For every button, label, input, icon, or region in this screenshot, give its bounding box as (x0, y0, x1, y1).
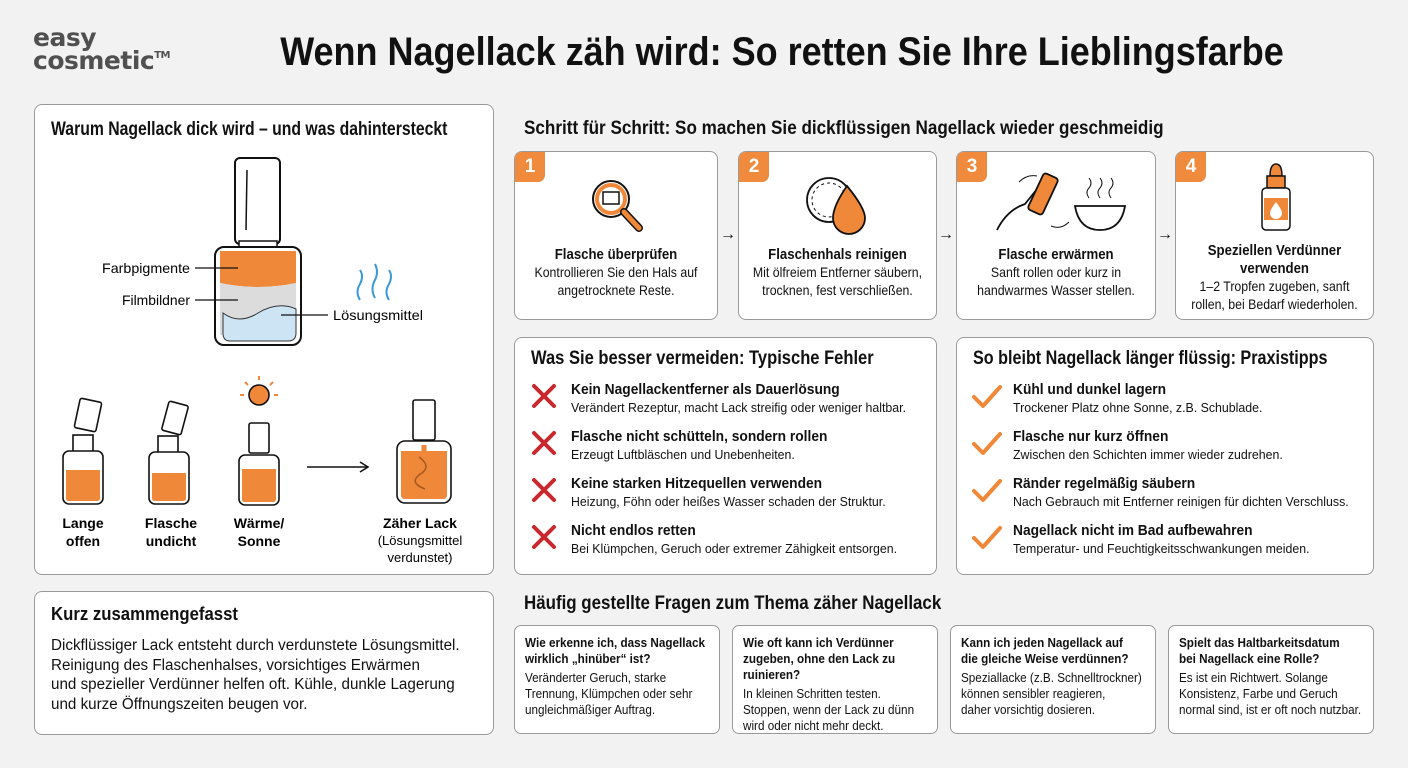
step 2: Flaschenhals reinigen (768, 246, 907, 263)
faq 3 (950, 625, 1156, 734)
tip 4 (972, 523, 1310, 556)
arrow: → (1157, 226, 1173, 243)
faq 2: wird oder nicht mehr deckt. (743, 718, 883, 733)
panel: mistakes: Heizung, Föhn oder heißes Wasser schaden der Struktur. (571, 494, 886, 509)
panel: tips: Temperatur- und Feuchtigkeitsschwankungen meiden. (1013, 541, 1310, 556)
panel: mistakes: Verändert Rezeptur, macht Lack streifig oder weniger haltbar. (571, 400, 906, 415)
text: summary: und kurze Öffnungszeiten beugen vor. (51, 696, 307, 712)
illustration: bottle layers: Lösungsmittel (333, 307, 423, 323)
illustration: bottle layers: Sonne (238, 533, 281, 549)
faq 3: die gleiche Weise verdünnen? (961, 651, 1129, 666)
panel: tips: Kühl und dunkel lagern (1013, 382, 1166, 398)
heading: causes: Warum Nagellack dick wird – und was dahintersteckt (51, 119, 447, 140)
heading: tips: So bleibt Nagellack länger flüssig: Praxistipps (973, 348, 1328, 369)
tip 3 (972, 476, 1349, 509)
heading: mistakes: Was Sie besser vermeiden: Typische Fehler (531, 348, 874, 369)
text: summary: und spezieller Verdünner helfen oft. Kühle, dunkle Lagerung (51, 676, 455, 693)
title: Wenn Nagellack zäh wird: So retten Sie Ihre Lieblingsfarbe (280, 30, 1284, 74)
step 4 (1175, 151, 1374, 320)
logo: cosmeticTM (33, 46, 170, 75)
illustration: bottle layers: verdunstet) (387, 550, 453, 565)
heading: summary: Kurz zusammengefasst (51, 604, 238, 624)
panel: mistakes: Bei Klümpchen, Geruch oder extremer Zähigkeit entsorgen. (571, 541, 897, 556)
heading: steps: Schritt für Schritt: So machen Sie dickflüssigen Nagellack wieder geschmeidig (524, 118, 1164, 139)
faq 1: Trennung, Klümpchen oder sehr (525, 686, 692, 701)
step 3: 3 (967, 156, 977, 177)
step 2 (738, 151, 937, 320)
panel: mistakes: Flasche nicht schütteln, sondern rollen (571, 429, 827, 445)
faq 2: In kleinen Schritten testen. (743, 686, 881, 701)
mistake 3 (532, 476, 886, 509)
step 1: Kontrollieren Sie den Hals auf (534, 264, 697, 280)
faq 4: Es ist ein Richtwert. Solange (1179, 670, 1328, 685)
text: summary: Dickflüssiger Lack entsteht durch verdunstete Lösungsmittel. (51, 637, 460, 654)
panel: tips: Zwischen den Schichten immer wieder zudrehen. (1013, 447, 1283, 462)
logo (33, 23, 170, 75)
step 4: Speziellen Verdünner (1208, 242, 1341, 259)
step 2: 2 (749, 156, 759, 177)
step 3 (956, 151, 1156, 320)
mistake 2 (532, 429, 827, 462)
faq 1: Veränderter Geruch, starke (525, 670, 666, 685)
small bottles (63, 385, 451, 505)
faq 4 (1168, 625, 1374, 734)
step 1: 1 (525, 156, 535, 177)
faq 4: normal sind, ist er oft noch nutzbar. (1179, 702, 1361, 717)
step 4: rollen, bei Bedarf wiederholen. (1191, 296, 1358, 312)
illustration: bottle layers: offen (66, 533, 100, 549)
tip 1 (972, 382, 1262, 415)
panel: tips (956, 337, 1374, 575)
panel: tips: Ränder regelmäßig säubern (1013, 476, 1195, 492)
icon: hands and bowl (996, 172, 1126, 231)
faq 1: Wie erkenne ich, dass Nagellack (525, 635, 705, 650)
icon: dropper bottle (1261, 163, 1291, 231)
illustration: bottle layers: undicht (146, 533, 197, 549)
mistake 1 (532, 382, 906, 415)
faq 4: Spielt das Haltbarkeitsdatum (1179, 635, 1340, 650)
panel: tips: Trockener Platz ohne Sonne, z.B. Schublade. (1013, 400, 1262, 415)
step 3: Flasche erwärmen (998, 246, 1114, 263)
illustration: bottle layers: Farbpigmente (102, 260, 190, 276)
step 2: trocknen, fest verschließen. (762, 282, 913, 298)
icon: pad and drop (806, 177, 866, 235)
faq 2: ruinieren? (743, 667, 800, 682)
step 4: verwenden (1240, 260, 1309, 277)
illustration: bottle layers (62, 157, 462, 565)
illustration: bottle layers: Filmbildner (122, 292, 190, 308)
panel: summary (34, 591, 494, 735)
faq 1: wirklich „hinüber“ ist? (525, 651, 650, 666)
step 3: handwarmes Wasser stellen. (977, 282, 1135, 298)
faq 4: Konsistenz, Farbe und Geruch (1179, 686, 1338, 701)
illustration: bottle layers: Lange (62, 515, 104, 531)
faq 2: Wie oft kann ich Verdünner (743, 635, 894, 650)
panel: mistakes: Erzeugt Luftbläschen und Unebenheiten. (571, 447, 795, 462)
illustration: bottle layers: Zäher Lack (383, 515, 457, 531)
faq 3: daher vorsichtig dosieren. (961, 702, 1095, 717)
step 4: 4 (1186, 156, 1196, 177)
panel: causes (34, 104, 494, 575)
panel: tips: Nagellack nicht im Bad aufbewahren (1013, 523, 1253, 539)
faq 2: Stoppen, wenn der Lack zu dünn (743, 702, 914, 717)
illustration: bottle layers: (Lösungsmittel (378, 533, 462, 548)
faq 4: bei Nagellack eine Rolle? (1179, 651, 1319, 666)
panel: mistakes: Keine starken Hitzequellen verwenden (571, 476, 822, 492)
text: summary (51, 637, 460, 712)
step 4: 1–2 Tropfen zugeben, sanft (1199, 278, 1350, 294)
icon: magnifier (592, 180, 643, 232)
arrow: → (720, 226, 736, 243)
logo: easy (33, 23, 96, 52)
faq 1: ungleichmäßiger Auftrag. (525, 702, 655, 717)
panel: tips: Nach Gebrauch mit Entferner reinigen für dichten Verschluss. (1013, 494, 1349, 509)
mistake 4 (532, 523, 897, 556)
panel: mistakes: Kein Nagellackentferner als Dauerlösung (571, 382, 840, 398)
panel: mistakes (514, 337, 937, 575)
faq 1 (514, 625, 720, 734)
faq 3: Speziallacke (z.B. Schnelltrockner) (961, 670, 1142, 685)
heading: faq: Häufig gestellte Fragen zum Thema zäher Nagellack (524, 593, 941, 614)
panel: tips: Flasche nur kurz öffnen (1013, 429, 1168, 445)
illustration: bottle layers: Flasche (145, 515, 197, 531)
step 2: Mit ölfreiem Entferner säubern, (753, 264, 922, 280)
faq 3: können sensibler reagieren, (961, 686, 1105, 701)
step 3: Sanft rollen oder kurz in (991, 264, 1121, 280)
faq 3: Kann ich jeden Nagellack auf (961, 635, 1123, 650)
arrow: → (938, 226, 954, 243)
faq 2: zugeben, ohne den Lack zu (743, 651, 895, 666)
illustration: bottle layers: Wärme/ (234, 515, 284, 531)
panel: mistakes: Nicht endlos retten (571, 523, 696, 539)
tip 2 (972, 429, 1283, 462)
step 1: angetrocknete Reste. (557, 282, 675, 298)
step 1 (514, 151, 718, 320)
faq 2 (732, 625, 938, 734)
text: summary: Reinigung des Flaschenhalses, vorsichtiges Erwärmen (51, 656, 420, 674)
step 1: Flasche überprüfen (555, 246, 677, 263)
